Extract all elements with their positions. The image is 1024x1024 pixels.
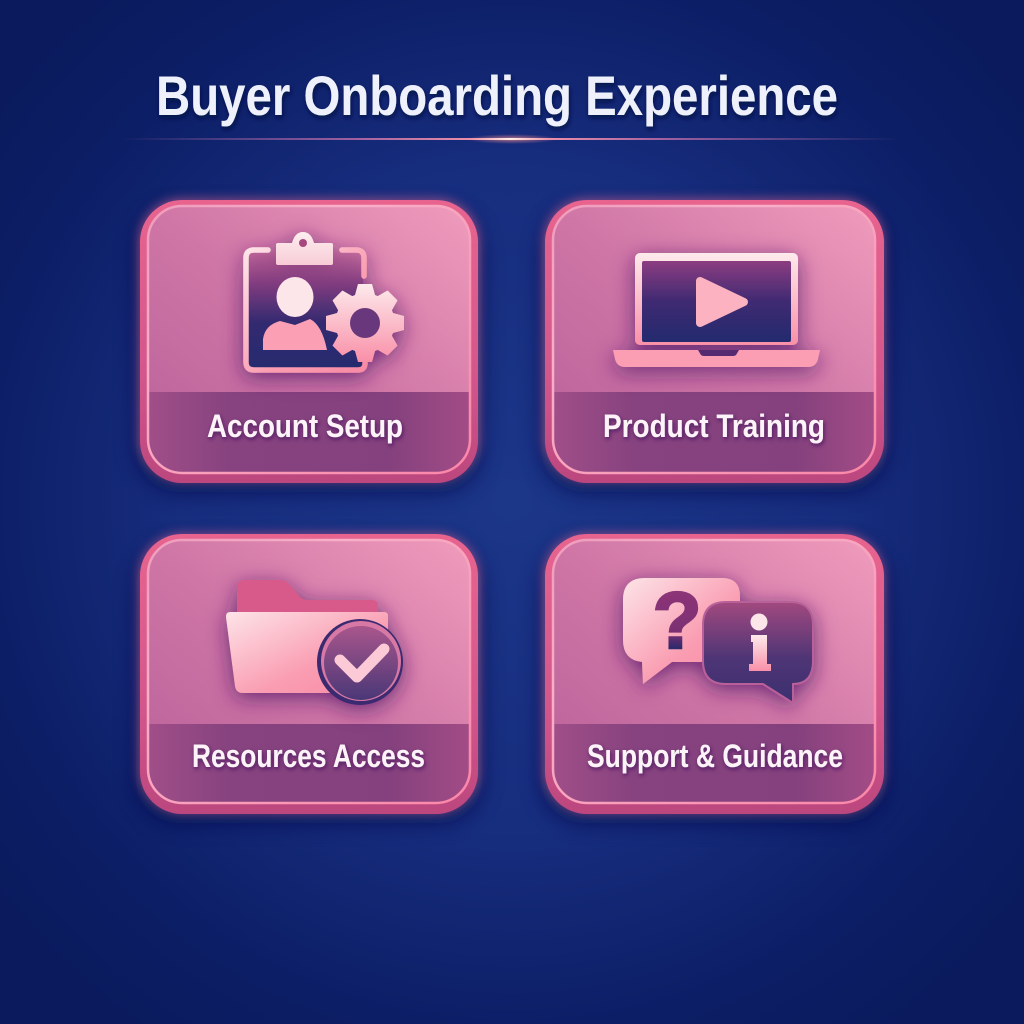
label: account setup: Account Setup — [207, 408, 403, 444]
title divider glow — [120, 134, 900, 144]
label: product training: Product Training — [603, 408, 825, 444]
panel: resources access — [136, 533, 482, 823]
label: resources access: Resources Access — [192, 738, 425, 774]
label: support and guidance: Support & Guidance — [587, 738, 843, 774]
icon: clipboard with user and gear — [246, 232, 404, 371]
icon: folder with check badge — [226, 580, 403, 705]
panel: product training — [541, 198, 887, 492]
icon: question and info speech bubbles — [623, 576, 813, 703]
panel: account setup — [136, 198, 482, 492]
panel: support and guidance — [541, 533, 887, 823]
icon: question and info speech bubbles: ? — [653, 576, 701, 665]
icon: laptop with play button — [613, 253, 820, 367]
title: Buyer Onboarding Experience — [156, 64, 838, 127]
